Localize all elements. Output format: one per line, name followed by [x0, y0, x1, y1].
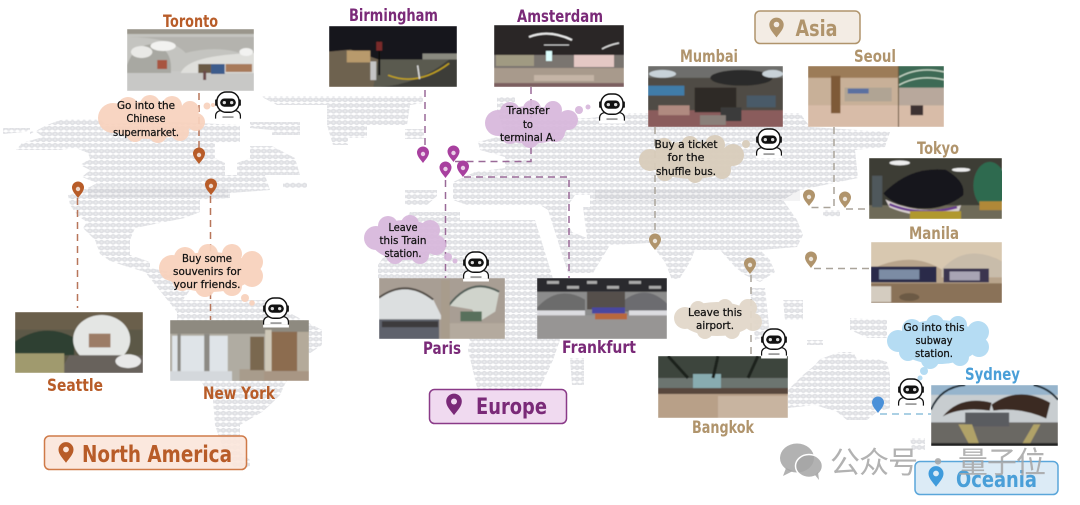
- bubble: Buy a ticket for the shuffle bus: shuffle bus.: [656, 166, 716, 178]
- connector: Seattle: [76, 198, 78, 308]
- bubble: Leave this airport: [674, 299, 762, 339]
- map: Madagascar: [570, 358, 584, 385]
- map: Japan: [823, 210, 840, 217]
- bubble: Buy a ticket for the shuffle bus: for the: [668, 152, 704, 164]
- region tag: Asia: [755, 11, 860, 44]
- photo: Seattle panorama: [15, 312, 143, 373]
- bubble: Transfer to terminal A: Transfer: [505, 105, 550, 117]
- label: Paris: Paris: [423, 339, 461, 358]
- map: Iceland: [405, 129, 424, 139]
- map: Quebec and Labrador: [237, 146, 300, 175]
- bubble: Go into this subway station: Go into this: [904, 322, 964, 334]
- bubble: Leave this Train station: Leave: [388, 222, 418, 234]
- pins: Europe: [417, 146, 469, 178]
- bubble: Go into this subway station: [887, 315, 989, 380]
- icon: WeChat logo: [780, 444, 822, 480]
- label: New York: New York: [203, 384, 276, 403]
- robot: Amsterdam: [599, 94, 625, 123]
- connector: Sydney: [880, 413, 931, 415]
- photo: Amsterdam panorama: [494, 25, 624, 87]
- bubble: Go into the Chinese supermarket: Chinese: [126, 113, 166, 125]
- bubble: Go into this subway station: subway: [916, 335, 952, 347]
- label: Birmingham: Birmingham: [349, 6, 438, 25]
- bubble: Buy some souvenirs for your friends: your friends.: [174, 279, 240, 291]
- label: Amsterdam: Amsterdam: [517, 7, 603, 26]
- pins: Asia: [649, 190, 851, 274]
- location pins: [72, 146, 884, 413]
- map: Australia: [788, 352, 890, 420]
- bubble: Transfer to terminal A: terminal A.: [500, 132, 556, 144]
- photo: Tokyo panorama: [869, 158, 1002, 219]
- map: New Zealand: [910, 438, 925, 450]
- map: Arctic islands: [250, 122, 300, 135]
- pins: North America: [72, 148, 217, 198]
- map: darker band: [88, 187, 800, 201]
- map: North America: [3, 119, 270, 312]
- label: Tokyo: Tokyo: [917, 139, 959, 158]
- dashed connector lines: [78, 87, 931, 414]
- photo: Sydney panorama: [931, 385, 1058, 446]
- map: Newfoundland: [283, 182, 307, 188]
- bubble: Buy some souvenirs for your friends: souvenirs for: [173, 266, 242, 278]
- robot: Paris: [463, 252, 489, 281]
- photo: Toronto panorama: [127, 29, 254, 91]
- robot: Mumbai: [756, 129, 782, 158]
- map: Africa: [378, 212, 560, 400]
- connector: Tokyo: [846, 208, 869, 210]
- region tag: Oceania: [915, 462, 1058, 494]
- label: Mumbai: Mumbai: [680, 47, 738, 66]
- bubble: Leave this Train station: station.: [384, 248, 422, 260]
- bubble: Buy a ticket for the shuffle bus: [639, 135, 750, 183]
- photo: Frankfurt panorama: [537, 278, 667, 339]
- connector: New York: [210, 196, 212, 320]
- pin: Sydney: [872, 396, 884, 413]
- watermark text: 公众号 · 量子位: [830, 438, 1046, 482]
- photo: Manila panorama: [871, 242, 1002, 303]
- map: British Isles: [405, 190, 437, 205]
- city labels: [47, 6, 1020, 437]
- map: Borneo: [783, 300, 803, 320]
- connector: Bangkok: [750, 275, 752, 356]
- bubble: Leave this airport: airport.: [696, 320, 734, 332]
- bubble: Leave this airport: Leave this: [688, 307, 742, 319]
- bubble: Leave this Train station: [364, 215, 458, 264]
- map: New Guinea: [850, 318, 887, 338]
- robots: [215, 92, 924, 408]
- robot: Sydney: [898, 379, 924, 408]
- bubble: Go into the Chinese supermarket: [98, 95, 215, 143]
- connector: Paris: [444, 180, 446, 278]
- bubble: Buy some souvenirs for your friends: [159, 244, 263, 306]
- label: Toronto: Toronto: [163, 12, 218, 31]
- watermark: [780, 438, 1046, 482]
- connector: Seoul: [808, 127, 834, 208]
- photo: New York panorama: [170, 320, 309, 381]
- label: Sydney: Sydney: [965, 365, 1020, 384]
- label: Manila: Manila: [909, 224, 959, 243]
- connector: Frankfurt: [464, 177, 569, 278]
- bubble: Transfer to terminal A: [485, 100, 590, 148]
- label: Seattle: Seattle: [47, 376, 103, 395]
- label: Bangkok: Bangkok: [692, 418, 755, 437]
- robot: Bangkok: [761, 329, 787, 358]
- connector: Mumbai: [654, 127, 656, 237]
- map: islands: [807, 340, 823, 345]
- label: Frankfurt: Frankfurt: [562, 338, 636, 357]
- bubble: Go into the Chinese supermarket: supermarket.: [113, 127, 179, 139]
- bubble: Go into this subway station: station.: [915, 348, 953, 360]
- bubble: Buy some souvenirs for your friends: Buy some: [182, 253, 232, 265]
- robot: Toronto: [215, 92, 241, 121]
- bubble: Leave this Train station: this Train: [380, 235, 426, 247]
- region tag: North America: North America: [82, 442, 232, 468]
- bubble: Buy a ticket for the shuffle bus: Buy a ticket: [654, 139, 718, 151]
- region tag: Europe: Europe: [476, 395, 547, 420]
- map: Greenland: [260, 96, 423, 145]
- photo: Paris panorama: [379, 278, 505, 339]
- photo: Birmingham panorama: [329, 26, 457, 87]
- map: South America: [177, 300, 322, 468]
- map: Malay peninsula: [750, 288, 770, 340]
- photo: Seoul panorama: [808, 66, 944, 127]
- connector: Manila: [814, 268, 871, 270]
- photo: Mumbai panorama: [648, 66, 783, 127]
- region tag: Asia: Asia: [796, 17, 838, 42]
- bubble: Go into the Chinese supermarket: Go into the: [117, 100, 175, 112]
- pin centres: [76, 151, 847, 267]
- world map of dots: [3, 96, 925, 468]
- connector: Amsterdam: [455, 87, 531, 162]
- photo: Bangkok panorama: [658, 356, 788, 418]
- connector: Toronto: [198, 93, 200, 152]
- region tag: North America: [44, 436, 246, 470]
- map: Caspian gap: [567, 195, 590, 238]
- robot: New York: [263, 298, 289, 327]
- label: Seoul: Seoul: [854, 47, 896, 66]
- bubble: Transfer to terminal A: to: [523, 119, 533, 131]
- region tag: Europe: [430, 390, 566, 424]
- connector: Birmingham: [424, 90, 426, 150]
- region tag: Oceania: Oceania: [956, 468, 1037, 493]
- map: Eurasia: [453, 97, 890, 282]
